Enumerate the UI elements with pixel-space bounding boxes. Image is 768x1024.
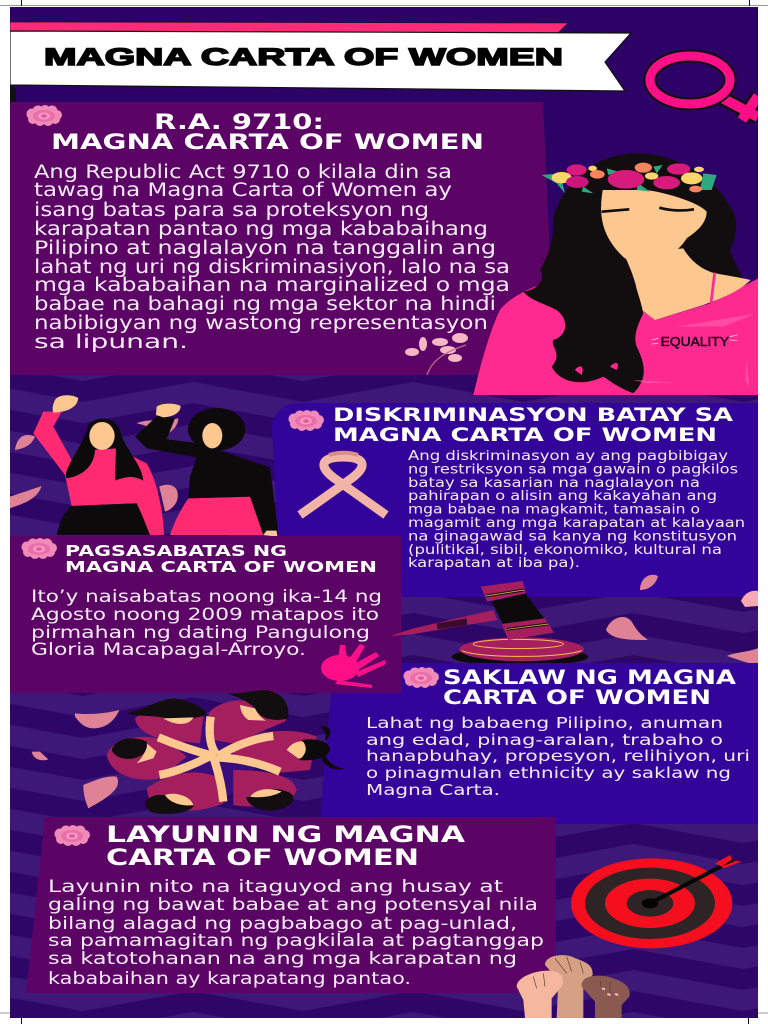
icon: pink leaves sprig xyxy=(405,333,468,375)
background: chevron pattern xyxy=(10,375,758,1018)
text block: R.A. 9710 description: sa lipunan. xyxy=(34,332,188,353)
text block: diskriminasyon description: (pulitikal, sibil, ekonomiko, kultural na xyxy=(408,543,722,558)
text block: pagsasabatas description: pirmahan ng dating Pangulong xyxy=(31,623,370,642)
icon: pink handprint xyxy=(321,644,386,688)
heading: R.A. 9710: MAGNA CARTA OF WOMEN xyxy=(51,130,484,154)
illustration: three raised fists xyxy=(517,955,630,1018)
text block: saklaw description: ang edad, pinag-aralan, trabaho o xyxy=(366,731,723,749)
panel: pagsasabatas xyxy=(10,536,401,693)
text block: pagsasabatas description: Gloria Macapagal-Arroyo. xyxy=(31,640,306,659)
text block: R.A. 9710 description: mga kababaihan na marginalized o mga xyxy=(34,275,510,296)
illustration: target with arrow xyxy=(571,855,742,948)
petals around gavel xyxy=(606,575,758,665)
text block: R.A. 9710 description: Ang Republic Act 9710 o kilala din sa xyxy=(34,162,452,183)
long hair xyxy=(523,186,644,393)
heading: diskriminasyon: MAGNA CARTA OF WOMEN xyxy=(333,424,717,446)
text block: layunin description: sa pamamagitan ng pagkilala at pagtanggap xyxy=(48,931,544,950)
text block: layunin description xyxy=(48,877,544,988)
bodies xyxy=(107,700,317,811)
text block: pagsasabatas description: Ito’y naisabatas noong ika-14 ng xyxy=(31,587,382,606)
text block: diskriminasyon description: Ang diskriminasyon ay ang pagbibigay xyxy=(408,449,728,464)
arms xyxy=(158,717,280,802)
panel: diskriminasyon xyxy=(272,403,758,597)
text block: saklaw description xyxy=(366,714,750,799)
icon: rose xyxy=(22,538,57,559)
text block: layunin description: kababaihan ay karapatang pantao. xyxy=(48,969,411,988)
illustration: woman with flower crown xyxy=(473,153,758,395)
text block: pagsasabatas description xyxy=(31,587,382,659)
text block: diskriminasyon description: na ginagawad sa kanya ng konstitusyon xyxy=(408,529,737,544)
panel: R.A. 9710 xyxy=(10,102,553,375)
heading: R.A. 9710: R.A. 9710: xyxy=(154,110,324,134)
text block: saklaw description: Magna Carta. xyxy=(366,781,500,799)
text block: R.A. 9710 description: tawag na Magna Carta of Women ay xyxy=(34,180,452,201)
heading: layunin: CARTA OF WOMEN xyxy=(106,846,419,871)
heading: pagsasabatas: MAGNA CARTA OF WOMEN xyxy=(65,558,377,576)
icon: rose xyxy=(54,825,90,846)
hair back xyxy=(553,153,742,280)
heading: layunin xyxy=(106,823,465,871)
text block: saklaw description: hanapbuhay, propesyon, relihiyon, uri xyxy=(366,747,750,765)
text block: saklaw description: o pinagmulan ethnicity ay saklaw ng xyxy=(366,764,731,782)
heading: saklaw: SAKLAW NG MAGNA xyxy=(443,666,736,689)
illustration: circle of women xyxy=(32,690,345,814)
text block: R.A. 9710 description: babae na bahagi ng mga sektor na hindi xyxy=(34,294,496,315)
header ribbon xyxy=(10,22,631,109)
text block: layunin description: bilang alagad ng pagbabago at pag-unlad, xyxy=(48,914,517,933)
panel: saklaw xyxy=(320,663,758,824)
text block: layunin description: Layunin nito na itaguyod ang husay at xyxy=(48,877,504,896)
flower crown xyxy=(542,163,717,193)
heading: diskriminasyon: DISKRIMINASYON BATAY SA xyxy=(333,404,733,426)
heading: pagsasabatas: PAGSASABATAS NG xyxy=(65,542,287,560)
icon: rose xyxy=(288,410,324,431)
heading: saklaw xyxy=(444,669,736,704)
icon: pink ribbon xyxy=(300,453,386,515)
neck and chest xyxy=(623,248,751,320)
text block: R.A. 9710 description: lahat ng uri ng diskriminasiyon, lalo na sa xyxy=(34,257,510,278)
text block: layunin description: sa katotohanan na ang mga karapatan ng xyxy=(48,949,517,968)
text block: R.A. 9710 description: Pilipino at naglalayon na tanggalin ang xyxy=(34,238,496,259)
center shadow xyxy=(170,712,257,798)
text block: diskriminasyon description: ng restriksyon sa mga gawain o pagkilos xyxy=(408,462,738,477)
text block: diskriminasyon description xyxy=(408,449,745,571)
text block: diskriminasyon description: batay sa kasarian na naglalayon na xyxy=(408,476,700,491)
face xyxy=(598,190,707,263)
petals xyxy=(10,418,178,512)
text block: R.A. 9710 description: karapatan pantao ng mga kababaihang xyxy=(34,219,488,240)
shirt slogan: EQUALITY xyxy=(661,334,729,349)
icon: rose xyxy=(404,667,439,688)
text block: R.A. 9710 description: nabibigyan ng wastong representasyon xyxy=(34,313,488,334)
text block: saklaw description: Lahat ng babaeng Pilipino, anuman xyxy=(366,714,723,732)
heading: diskriminasyon xyxy=(335,407,733,442)
heading: pagsasabatas xyxy=(66,545,376,572)
heading: R.A. 9710 xyxy=(54,113,482,150)
title: MAGNA CARTA OF WOMEN xyxy=(44,44,563,71)
illustration: gavel xyxy=(390,581,588,666)
heading: saklaw: CARTA OF WOMEN xyxy=(443,686,711,709)
text block: pagsasabatas description: Agosto noong 2009 matapos ito xyxy=(31,605,379,624)
woman in black xyxy=(170,497,267,535)
text block: diskriminasyon description: magamit ang mga karapatan at kalayaan xyxy=(408,516,745,531)
petals xyxy=(32,710,119,808)
icon: female symbol xyxy=(650,56,758,120)
woman in pink xyxy=(33,412,164,535)
panel: layunin xyxy=(26,817,556,993)
text block: R.A. 9710 description xyxy=(34,162,510,353)
background: top section xyxy=(10,7,758,320)
text block: layunin description: galing ng bawat babae at ang potensyal nila xyxy=(48,895,538,914)
text block: R.A. 9710 description: isang batas para sa proteksyon ng xyxy=(34,200,429,221)
text block: diskriminasyon description: pahirapan o alisin ang kakayahan ang xyxy=(408,489,717,504)
illustration: two women raising fists xyxy=(10,395,278,537)
icon: rose xyxy=(26,105,62,126)
shirt xyxy=(473,277,758,395)
text block: diskriminasyon description: karapatan at iba pa). xyxy=(408,556,580,571)
text block: diskriminasyon description: mga babae na magkamit, tamasain o xyxy=(408,503,700,518)
heading: layunin: LAYUNIN NG MAGNA xyxy=(106,823,465,848)
heads xyxy=(127,698,207,719)
